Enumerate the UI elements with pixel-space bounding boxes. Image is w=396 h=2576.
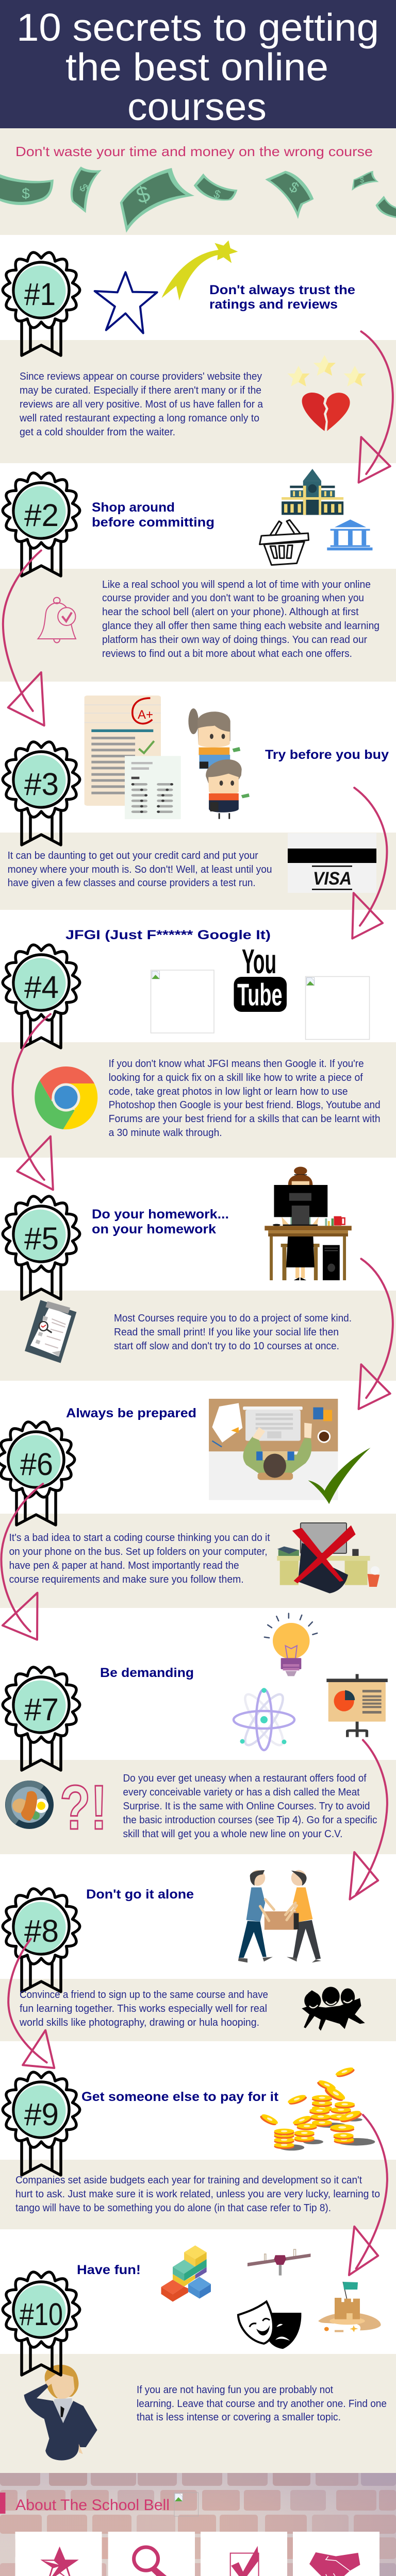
panel: tip 6 bbox=[0, 1399, 396, 1669]
arrow bbox=[8, 1939, 54, 2068]
icon: test paper bbox=[85, 696, 181, 819]
text block bbox=[137, 2384, 387, 2423]
title: 10 secrets to getting bbox=[16, 6, 379, 49]
icon: tick in box bbox=[230, 2546, 259, 2576]
text block: on your phone on the bus. Set up folders on your computer, bbox=[9, 1546, 268, 1557]
icon: YouTube logo: You bbox=[242, 942, 276, 981]
title: the best online bbox=[65, 45, 328, 89]
text block: Companies set aside budgets each year for training and development so it can't bbox=[15, 2175, 362, 2186]
broken image placeholder bbox=[305, 977, 369, 1040]
text block: It can be daunting to get out your credit card and put your bbox=[8, 850, 258, 861]
badge #4: #4 bbox=[24, 970, 59, 1005]
text block bbox=[8, 850, 272, 889]
text block: If you don't know what JFGI means then Google it. If you're bbox=[109, 1058, 364, 1070]
text block: start off slow and don't try to do 10 courses at once. bbox=[114, 1341, 339, 1352]
icon: seesaw bbox=[248, 2249, 310, 2276]
text block: Like a real school you will spend a lot of time with your online bbox=[102, 579, 371, 590]
panel: tip 4 bbox=[0, 928, 396, 1190]
subtitle: Don't waste your time and money on the wrong course bbox=[15, 144, 373, 159]
text block: Surprise. It is the same with Online Courses. Try to avoid bbox=[123, 1801, 370, 1812]
icon: clipboard bbox=[25, 1300, 76, 1363]
panel: tip 8 bbox=[0, 1870, 396, 2068]
icon: YouTube logo bbox=[234, 942, 287, 1012]
badge #2: #2 bbox=[24, 498, 59, 533]
heading bbox=[209, 283, 355, 312]
badge #9: #9 bbox=[24, 2097, 59, 2132]
badge #6: #6 bbox=[20, 1447, 53, 1482]
arrow bbox=[1, 1484, 43, 1640]
panel: tip 5 bbox=[0, 1167, 396, 1409]
icon: lego bricks bbox=[161, 2245, 211, 2302]
broken image placeholder bbox=[151, 970, 214, 1033]
icon: YouTube logo: Tube bbox=[237, 978, 283, 1012]
icon: basket bbox=[260, 520, 309, 565]
icon: bank bbox=[327, 519, 372, 550]
icon: falling money: $ bbox=[77, 182, 91, 194]
badge #3 bbox=[3, 742, 80, 845]
heading: Don't always trust the bbox=[209, 283, 355, 297]
panel: tip 3 bbox=[0, 696, 396, 939]
text block bbox=[15, 2175, 380, 2214]
icon: visa card: VISA bbox=[313, 869, 352, 889]
badge #1 bbox=[3, 252, 80, 355]
icon: falling money: $ bbox=[360, 176, 365, 184]
panel: about the school bell bbox=[0, 2473, 396, 2576]
icon: falling money: $ bbox=[22, 185, 30, 201]
panel: tip 1 bbox=[0, 241, 396, 483]
text block: money where your mouth is. So don't! Well, at least until you bbox=[8, 864, 272, 875]
heading: Always be prepared bbox=[66, 1406, 196, 1420]
badge #4 bbox=[3, 945, 80, 1048]
heading: JFGI (Just F****** Google It) bbox=[65, 928, 271, 942]
badge #5: #5 bbox=[24, 1221, 59, 1256]
badge #8: #8 bbox=[24, 1913, 59, 1948]
heading bbox=[92, 1207, 229, 1236]
title: courses bbox=[127, 85, 267, 128]
text block bbox=[114, 1313, 352, 1352]
icon: green tick bbox=[308, 1448, 371, 1504]
text block: Most Courses require you to do a project of some kind. bbox=[114, 1313, 352, 1324]
icon: falling money: $ bbox=[212, 187, 222, 201]
panel: tip 9 bbox=[0, 2066, 396, 2275]
icon: person at laptop, top view bbox=[209, 1399, 338, 1500]
accent bar bbox=[0, 2493, 5, 2514]
icon: school building bbox=[282, 469, 343, 515]
text block bbox=[109, 1058, 381, 1139]
text block: fun learning together. This works especially well for real bbox=[20, 2003, 267, 2014]
text block: reviews are all very positive. Most of us have fallen for a bbox=[20, 399, 263, 410]
arrow bbox=[359, 1259, 393, 1409]
text block: may be curated. Especially if there aren't many or if the bbox=[20, 385, 261, 396]
panel: tip 2 bbox=[0, 469, 396, 725]
badge #3: #3 bbox=[24, 767, 59, 802]
text block: well rated restaurant expecting a long romance only to bbox=[19, 413, 259, 424]
icon: presentation board bbox=[326, 1674, 388, 1737]
panel: subtitle and money bbox=[0, 128, 396, 235]
icon: person at desk bbox=[265, 1167, 352, 1280]
text block: Forums are your best friend for a skills that can be learnt with bbox=[109, 1113, 381, 1125]
badge #5 bbox=[3, 1196, 80, 1299]
icon: customers with cash bbox=[188, 708, 250, 819]
badge #6 bbox=[0, 1422, 75, 1525]
broken image placeholder bbox=[174, 2493, 198, 2516]
text block: platform has their own way of doing things. You can read our bbox=[102, 634, 367, 646]
text block: hurt to ask. Just make sure it is work related, unless you are very lucky, learning to bbox=[15, 2189, 380, 2200]
text block: Convince a friend to sign up to the same course and have bbox=[20, 1989, 268, 2001]
text block: the basic introduction courses (see Tip 4). Go for a specific bbox=[123, 1815, 377, 1826]
text block: every conceivable variety or has a dish called the Meat bbox=[123, 1787, 360, 1798]
text block: that is less intense or covering a smaller topic. bbox=[137, 2412, 341, 2423]
text block: hear the school bell (alert on your phone). Although at first bbox=[102, 606, 359, 618]
text block: course provider and you don't want to be groaning when you bbox=[102, 592, 364, 604]
badge #7 bbox=[3, 1667, 80, 1770]
text block: Photoshop then Google is your best friend. Blogs, Youtube and bbox=[109, 1099, 381, 1111]
heading: Be demanding bbox=[100, 1666, 194, 1680]
arrow bbox=[12, 1014, 53, 1190]
icon: crossed-out messy desk bbox=[277, 1523, 380, 1594]
icons: stars and heart bbox=[95, 241, 366, 431]
heading: Don't go it alone bbox=[86, 1887, 194, 1902]
arrow bbox=[359, 331, 393, 483]
icon: theatre masks bbox=[238, 2301, 301, 2349]
icon: star bbox=[40, 2547, 79, 2576]
heading: Shop around bbox=[92, 500, 175, 515]
text block bbox=[19, 1989, 268, 2028]
text block: If you are not having fun you are probably not bbox=[137, 2384, 333, 2396]
icon: magnifying glass bbox=[134, 2547, 169, 2576]
arrow bbox=[352, 788, 387, 939]
arrow bbox=[350, 1740, 387, 1900]
card: honest bbox=[293, 2532, 380, 2576]
heading bbox=[92, 500, 214, 530]
text block bbox=[102, 579, 380, 659]
text block: world skills like photography, drawing or hula hooping. bbox=[19, 2017, 259, 2028]
title bbox=[16, 6, 379, 128]
panel: tip 7 bbox=[0, 1664, 396, 1900]
section heading: About The School Bell bbox=[15, 2497, 170, 2514]
text block: code, take great photos in low light or learn how to use bbox=[109, 1086, 348, 1097]
card: simple bbox=[201, 2532, 287, 2576]
text block: skill that will get you a whole new line on your C.V. bbox=[123, 1828, 342, 1840]
card: experts bbox=[15, 2532, 102, 2576]
badge #9 bbox=[3, 2072, 80, 2175]
text block: learning. Leave that course and try another one. Find one bbox=[137, 2398, 387, 2410]
text block: glance they all offer then same thing each website and learning bbox=[102, 620, 380, 632]
badge #10: #10 bbox=[20, 2297, 63, 2332]
card: thorough bbox=[108, 2532, 195, 2576]
icon: falling money bbox=[0, 166, 396, 233]
text block: tango will have to be something you do alone (in that case refer to Tip 8). bbox=[15, 2202, 331, 2214]
badge #8 bbox=[3, 1889, 80, 1992]
text block bbox=[9, 1532, 270, 1585]
arrow bbox=[3, 550, 44, 725]
text block: Since reviews appear on course providers' website they bbox=[20, 371, 262, 382]
text block: Read the small print! If you like your social life then bbox=[114, 1327, 339, 1338]
heading: Get someone else to pay for it bbox=[81, 2090, 279, 2104]
icon: visa card bbox=[288, 833, 376, 893]
icon: falling money: $ bbox=[287, 178, 302, 196]
text block: looking for a quick fix on a skill like how to write a piece of bbox=[109, 1072, 363, 1083]
arrow bbox=[349, 2115, 387, 2275]
icon: question and exclamation marks: ?! bbox=[60, 1772, 107, 1842]
heading: before committing bbox=[92, 515, 214, 530]
icon: bell bbox=[38, 598, 76, 642]
text block: have given a few classes and course providers a test run. bbox=[8, 877, 256, 889]
text block bbox=[123, 1773, 377, 1840]
heading: on your homework bbox=[92, 1222, 216, 1236]
heading: Do your homework... bbox=[92, 1207, 229, 1222]
icon: atom bbox=[234, 1688, 294, 1750]
panel: header bbox=[0, 0, 396, 128]
icon: group of friends bbox=[302, 1987, 365, 2031]
text block: reviews to find out a bit more about what each one offers. bbox=[102, 648, 352, 659]
panel: tip 10 bbox=[0, 2245, 396, 2473]
heading: Try before you buy bbox=[265, 748, 389, 762]
badge #10 bbox=[3, 2272, 80, 2375]
badge #1: #1 bbox=[24, 277, 56, 312]
text block: get a cold shoulder from the waiter. bbox=[20, 427, 175, 438]
text block: It's a bad idea to start a coding course thinking you can do it bbox=[9, 1532, 270, 1544]
heading: ratings and reviews bbox=[209, 297, 338, 312]
icon: chrome logo bbox=[35, 1066, 97, 1129]
icon: pile of coins bbox=[258, 2066, 375, 2150]
icon: plate of food bbox=[5, 1781, 54, 1829]
icon: falling money: $ bbox=[133, 181, 153, 209]
text block bbox=[19, 371, 263, 438]
icon: lightbulb base bbox=[283, 1664, 299, 1676]
badge #7: #7 bbox=[24, 1692, 59, 1727]
text block: Do you ever get uneasy when a restaurant offers food of bbox=[123, 1773, 367, 1784]
icon: two people carrying a box bbox=[238, 1870, 321, 1962]
badge #2 bbox=[3, 473, 80, 576]
icon: sandcastle bbox=[318, 2282, 381, 2332]
A+ grade: A+ bbox=[138, 708, 153, 722]
icon: confused businessman bbox=[24, 2365, 97, 2461]
brick wall background bbox=[0, 2473, 396, 2576]
text block: a 30 minute walk through. bbox=[109, 1127, 222, 1139]
icon: handshake bbox=[309, 2552, 360, 2576]
heading: Have fun! bbox=[77, 2263, 141, 2277]
icon: lightbulb bbox=[265, 1614, 317, 1669]
text block: have pen & paper at hand. Most importantly read the bbox=[9, 1560, 239, 1571]
text block: course requirements and make sure you follow them. bbox=[9, 1574, 244, 1585]
